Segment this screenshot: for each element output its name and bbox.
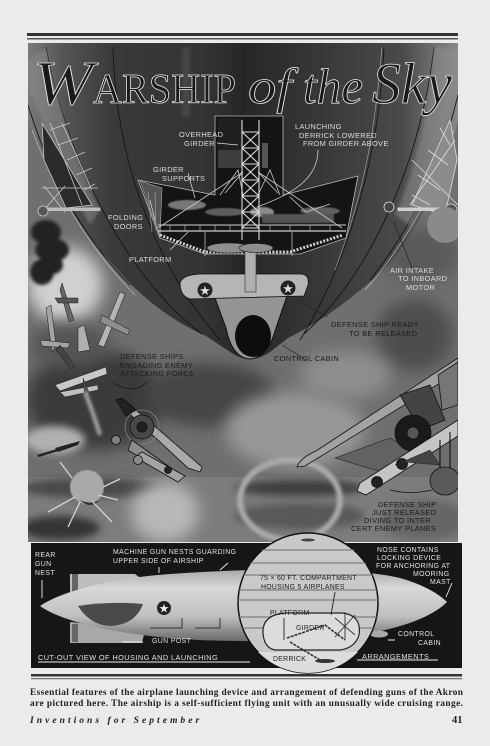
labels on the dark hull: DERRICK LOWERED xyxy=(299,131,377,140)
caption: are pictured here. The airship is a self-sufficient flying unit with an unusually wide cruising range. xyxy=(30,699,463,709)
cutaway circle xyxy=(238,533,378,676)
left gun blister window xyxy=(38,123,100,216)
labels on the sky xyxy=(120,320,436,533)
labels on the dark hull: PLATFORM xyxy=(129,255,172,264)
labels on the dark hull: GIRDER xyxy=(184,139,215,148)
labels inside circle xyxy=(260,575,357,663)
defense ship ready to be released: ★ xyxy=(199,283,211,298)
labels on the dark hull: DOORS xyxy=(114,222,143,231)
labels on the sky: ATTACKING FORCE xyxy=(120,369,194,378)
caption xyxy=(30,688,464,709)
labels on the sky: CERT ENEMY PLANES xyxy=(351,524,436,533)
airship annotation arrows xyxy=(113,143,432,492)
smoke plume at upper left xyxy=(30,220,69,285)
cut-out labels: REAR xyxy=(35,552,56,559)
airship side profile xyxy=(40,570,447,641)
labels on the sky: DEFENSE SHIP xyxy=(378,500,436,509)
cut-out labels: NOSE CONTAINS xyxy=(377,547,439,554)
distant planes xyxy=(37,441,80,457)
title: Warship of the Sky: the xyxy=(303,58,363,114)
airship hull seen from below xyxy=(28,43,458,359)
hull seam lines xyxy=(28,47,458,340)
labels on the dark hull: MOTOR xyxy=(406,283,435,292)
cut-out labels: MACHINE GUN NESTS GUARDING xyxy=(113,549,236,556)
smoke trail xyxy=(85,392,100,435)
cut-out labels: MOORING xyxy=(413,571,450,578)
girder supports xyxy=(158,170,342,228)
labels on the dark hull: TO INBOARD xyxy=(398,274,447,283)
cut-out labels: LOCKING DEVICE xyxy=(377,555,441,562)
panel arrows and underlines xyxy=(38,563,452,662)
labels on the dark hull: OVERHEAD xyxy=(179,130,223,139)
control cabin xyxy=(370,630,388,638)
labels on the sky: TO BE RELEASED xyxy=(349,329,417,338)
cut-out labels xyxy=(35,547,451,662)
released biplane lower right xyxy=(297,358,460,495)
cut-out labels: UPPER SIDE OF AIRSHIP xyxy=(113,558,204,565)
defense ship ready to be released xyxy=(180,243,308,359)
title: Warship of the Sky: W xyxy=(33,50,99,118)
labels inside circle: HOUSING 5 AIRPLANES xyxy=(261,584,345,591)
title: Warship of the Sky xyxy=(33,50,452,118)
title: Warship of the Sky: ARSHIP xyxy=(93,67,236,113)
cut-out labels: GUN POST xyxy=(152,638,192,645)
labels inside circle: PLATFORM xyxy=(270,610,309,617)
footer: page number: 41 xyxy=(452,715,462,726)
cut-out labels: ARRANGEMENTS xyxy=(362,652,429,661)
hangared airplanes xyxy=(168,200,340,223)
right gun blister window xyxy=(384,120,463,243)
labels on the dark hull: FROM GIRDER ABOVE xyxy=(303,139,389,148)
bottom double rule xyxy=(31,674,462,679)
labels inside circle: 75 × 60 FT. COMPARTMENT xyxy=(260,575,357,582)
labels on the dark hull: FOLDING xyxy=(108,213,143,222)
labels on the dark hull: AIR INTAKE xyxy=(390,266,434,275)
cut-out labels: MAST xyxy=(430,579,451,586)
cut-out labels: NEST xyxy=(35,570,55,577)
cut-out labels: FOR ANCHORING AT xyxy=(376,563,451,570)
title: Warship of the Sky: of xyxy=(248,58,299,114)
burning airplane group upper left xyxy=(40,283,130,397)
sky and clouds background xyxy=(28,120,458,542)
light hull flank streaks xyxy=(28,47,458,225)
labels on the sky: DEFENSE SHIPS xyxy=(120,352,184,361)
labels on the dark hull: LAUNCHING xyxy=(295,122,342,131)
labels on the dark hull xyxy=(108,122,447,292)
labels on the dark hull: SUPPORTS xyxy=(162,174,205,183)
caption: Essential features of the airplane launching device and arrangement of defending guns of the Akron xyxy=(30,688,464,698)
diving defense biplane center left xyxy=(112,398,202,482)
labels on the sky: ENGAGING ENEMY xyxy=(120,361,193,370)
top double rule xyxy=(27,33,458,40)
labels inside circle: DERRICK xyxy=(273,656,306,663)
labels on the sky: CONTROL CABIN xyxy=(274,354,339,363)
title: Warship of the Sky: Sky xyxy=(372,51,452,116)
labels inside circle: GIRDER xyxy=(296,625,325,632)
cut-out labels: CONTROL xyxy=(398,631,434,638)
labels on the sky: DIVING TO INTER xyxy=(364,516,431,525)
cut-out labels: GUN xyxy=(35,561,52,568)
labels on the sky: JUST RELEASED xyxy=(372,508,436,517)
cut-out labels: CUT-OUT VIEW OF HOUSING AND LAUNCHING xyxy=(38,653,218,662)
cut-out labels: CABIN xyxy=(418,640,441,647)
side struts xyxy=(150,618,220,628)
footer: section name: Inventions for September xyxy=(29,715,202,726)
rear gondola shape xyxy=(78,603,143,626)
exploding plane ball xyxy=(48,462,120,527)
main illustration panel xyxy=(20,43,470,543)
star insignia: ★ xyxy=(159,602,169,616)
labels on the dark hull: GIRDER xyxy=(153,165,184,174)
hangar bay opening xyxy=(138,116,358,254)
labels on the sky: DEFENSE SHIP READY xyxy=(331,320,419,329)
defense ship ready to be released: ★ xyxy=(282,281,294,296)
launching derrick tower xyxy=(242,120,259,240)
launching platform xyxy=(158,225,346,256)
airship side fins xyxy=(70,574,148,643)
cut-out view panel xyxy=(31,533,462,676)
folding doors xyxy=(140,181,162,236)
